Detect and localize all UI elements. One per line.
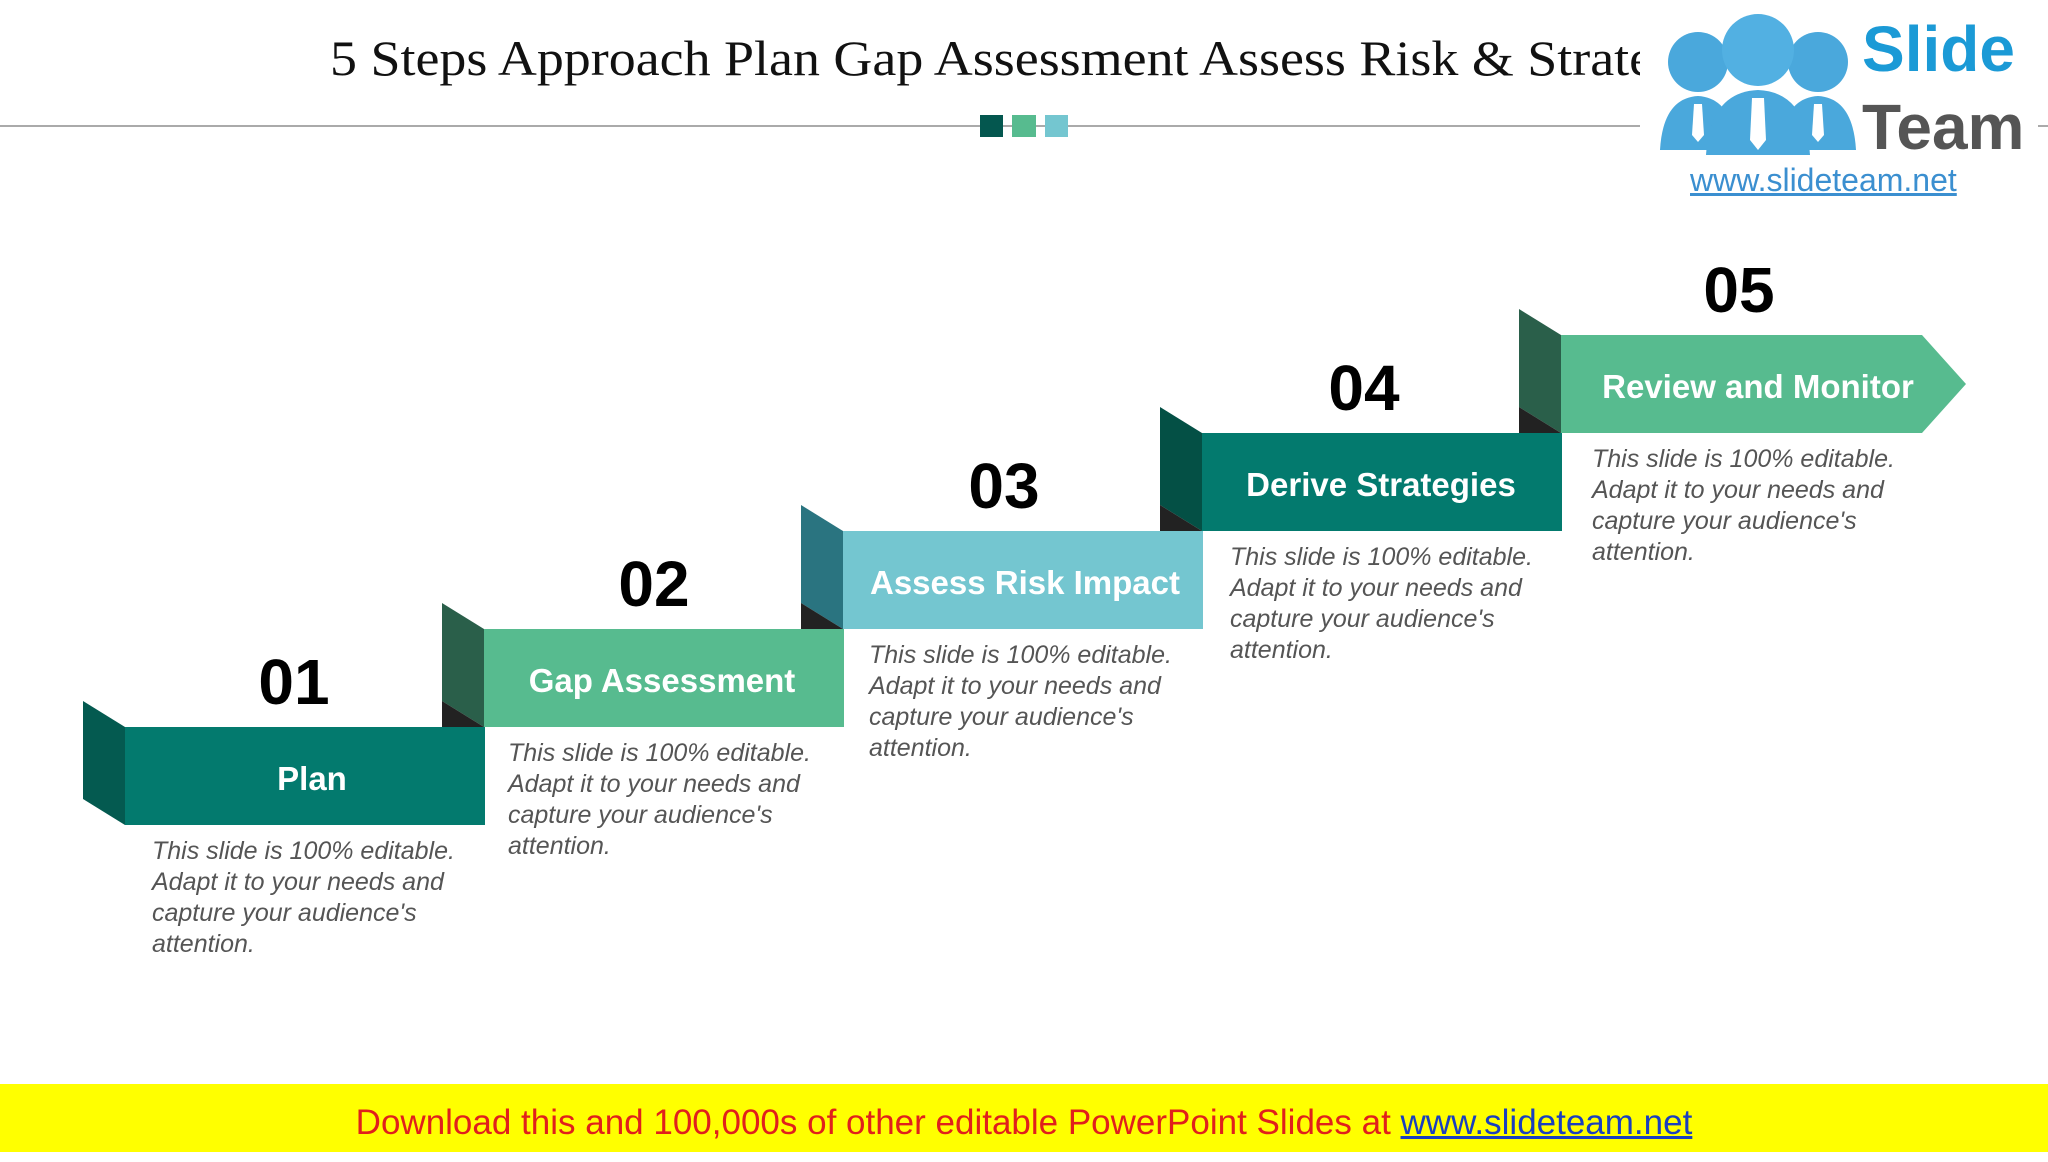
icon: people <box>1660 14 1856 155</box>
step 5: Review and Monitor <box>1519 254 1966 433</box>
logo: SlideTeam: Team <box>1862 91 2024 163</box>
step 4: Derive Strategies: Derive Strategies <box>1246 466 1516 503</box>
description 1: This slide is 100% editable. Adapt it to your needs and capture your audience's attention. <box>152 837 455 958</box>
step 4: Derive Strategies <box>1160 352 1562 531</box>
step 2: Gap Assessment <box>442 548 844 727</box>
description 3: This slide is 100% editable. Adapt it to your needs and capture your audience's attention. <box>869 641 1172 762</box>
footer banner <box>0 1084 2048 1152</box>
logo: SlideTeam <box>1640 0 2038 200</box>
description 5: This slide is 100% editable. Adapt it to your needs and capture your audience's attention. <box>1592 445 1895 566</box>
step 3: Assess Risk Impact: Assess Risk Impact <box>870 564 1180 601</box>
step 3: Assess Risk Impact: 03 <box>968 450 1040 522</box>
logo: SlideTeam: Slide <box>1862 13 2015 85</box>
title: 5 Steps Approach Plan Gap Assessment Assess Risk & Strategies <box>330 30 1740 86</box>
step 1: Plan <box>83 646 485 825</box>
step 5: Review and Monitor: 05 <box>1703 254 1775 326</box>
footer banner: Download this and 100,000s of other editable PowerPoint Slides at www.slideteam.net <box>356 1103 1692 1142</box>
step 1: Plan: Plan <box>277 760 347 797</box>
logo: SlideTeam: www.slideteam.net <box>1690 162 1957 198</box>
description 4: This slide is 100% editable. Adapt it to your needs and capture your audience's attention. <box>1230 543 1533 664</box>
step 1: Plan: 01 <box>258 646 330 718</box>
description 2: This slide is 100% editable. Adapt it to your needs and capture your audience's attention. <box>508 739 811 860</box>
step 5: Review and Monitor: Review and Monitor <box>1602 368 1914 405</box>
title accent squares <box>980 115 1068 137</box>
step 2: Gap Assessment: 02 <box>618 548 690 620</box>
step 3: Assess Risk Impact <box>801 450 1203 629</box>
step 4: Derive Strategies: 04 <box>1328 352 1400 424</box>
step 2: Gap Assessment: Gap Assessment <box>529 662 795 699</box>
